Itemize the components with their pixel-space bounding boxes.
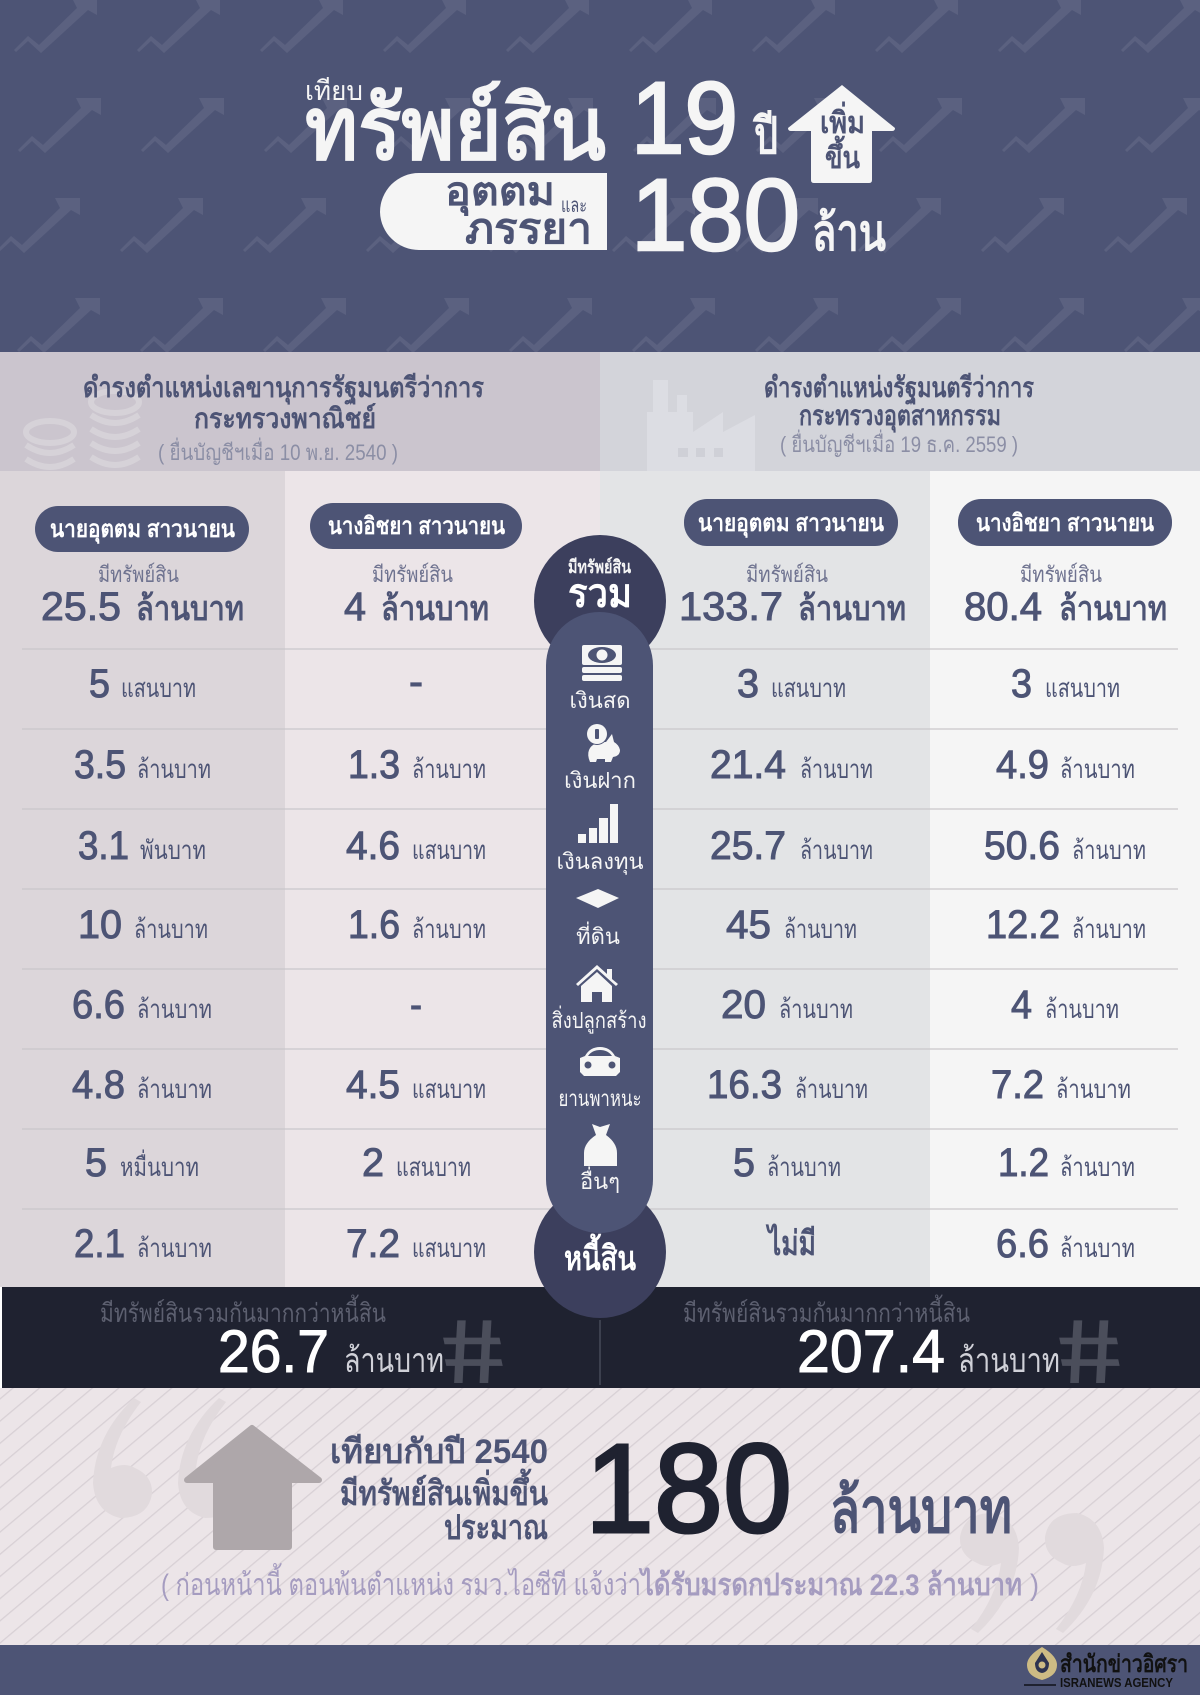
title: ปี	[752, 108, 778, 164]
column: Mrs Isaya 2559: ล้านบาท	[1045, 994, 1119, 1024]
column: Mrs Isaya 2540: 7.2	[346, 1222, 400, 1266]
name pill: นางอิชยา สาวนายน	[976, 510, 1155, 537]
column: Mr Uttama 2559: ล้านบาท	[767, 1152, 841, 1182]
total assets: ล้านบาท	[136, 590, 244, 628]
panel: left position heading	[0, 352, 600, 471]
panel: right position heading	[600, 352, 1200, 471]
column: Mr Uttama 2559: 21.4	[710, 743, 786, 787]
title: ทรัพย์สิน	[305, 79, 606, 178]
title: 180	[631, 158, 800, 272]
icon: money bag	[584, 1124, 617, 1166]
column: Mrs Isaya 2540: 4.5	[346, 1063, 400, 1107]
name pill: นางอิชยา สาวนายน	[328, 513, 506, 540]
panel: column backgrounds	[0, 471, 1200, 1287]
column: Mr Uttama 2559	[679, 499, 906, 1263]
net worth left: #	[430, 1300, 515, 1403]
panel: left position heading: กระทรวงพาณิชย์	[194, 403, 376, 434]
column: Mr Uttama 2540: 3.5	[74, 743, 126, 787]
column: Mrs Isaya 2540: -	[409, 660, 423, 704]
big number 180: 180	[585, 1418, 792, 1559]
circle: total assets	[534, 535, 666, 667]
unit: million baht: ล้านบาท	[830, 1477, 1012, 1546]
icon: coin stacks	[26, 391, 139, 467]
circle: liabilities: หนี้สิน	[564, 1233, 636, 1278]
circle: total assets: มีทรัพย์สิน	[568, 556, 632, 577]
column: Mrs Isaya 2559: ล้านบาท	[1060, 754, 1135, 784]
label: land: ที่ดิน	[576, 921, 620, 949]
panel: left position heading: ( ยื่นบัญชีฯเมื่อ 10 พ.ย. 2540 )	[158, 437, 398, 465]
title: 19	[631, 61, 738, 175]
column: Mr Uttama 2559: ล้านบาท	[800, 835, 873, 865]
column: Mrs Isaya 2559: ล้านบาท	[1060, 1152, 1135, 1182]
label: investment: เงินลงทุน	[556, 849, 644, 875]
column: Mr Uttama 2559: 20	[721, 983, 766, 1027]
panel: header background	[0, 0, 1200, 352]
panel: right position heading: กระทรวงอุตสาหกรรม	[799, 400, 1001, 433]
column: Mr Uttama 2540: ล้านบาท	[137, 754, 211, 784]
column: Mr Uttama 2559: ล้านบาท	[779, 994, 853, 1024]
column: Mrs Isaya 2540	[310, 503, 522, 1266]
panel: centre category column	[534, 535, 666, 1318]
total assets	[344, 562, 489, 629]
title: และ	[561, 195, 587, 217]
panel: right position heading: ดำรงตำแหน่งรัฐมนตรีว่าการ	[764, 372, 1034, 406]
icon: investment bars	[578, 804, 618, 843]
column: Mr Uttama 2540: 5	[89, 662, 110, 706]
column: Mrs Isaya 2559: 1.2	[998, 1141, 1049, 1185]
name pill	[35, 506, 249, 552]
column: Mr Uttama 2540: ล้านบาท	[137, 1233, 212, 1263]
column: Mrs Isaya 2559: ล้านบาท	[1072, 914, 1146, 944]
icon: piggy bank	[586, 723, 620, 762]
column: Mr Uttama 2559: ล้านบาท	[795, 1074, 868, 1104]
column: Mrs Isaya 2540: 1.6	[348, 903, 400, 947]
title: ภรรยา	[465, 205, 592, 252]
text: compared to 2540	[330, 1433, 548, 1547]
circle: liabilities	[534, 1186, 666, 1318]
logo: Isranews Agency: ISRANEWS AGENCY	[1060, 1675, 1173, 1690]
panel: left position heading: ดำรงตำแหน่งเลขานุการรัฐมนตรีว่าการ	[83, 372, 484, 406]
column: Mrs Isaya 2559: 6.6	[996, 1222, 1049, 1266]
column: Mr Uttama 2540: 5	[85, 1141, 107, 1185]
icon: cash	[582, 645, 622, 681]
note: )	[1030, 1569, 1039, 1602]
icon: car	[580, 1047, 620, 1076]
label: cash: เงินสด	[569, 688, 631, 713]
net worth left: มีทรัพย์สินรวมกันมากกว่าหนี้สิน	[100, 1294, 386, 1328]
label: others: อื่นๆ	[580, 1166, 620, 1194]
name pill	[684, 499, 898, 546]
column: Mrs Isaya 2559: 12.2	[986, 903, 1060, 947]
total assets	[41, 562, 244, 629]
panel: footer	[0, 1645, 1200, 1695]
column: Mr Uttama 2540: ล้านบาท	[134, 914, 208, 944]
column: Mrs Isaya 2559: ล้านบาท	[1060, 1233, 1135, 1263]
total assets: 133.7	[679, 585, 783, 629]
column: Mrs Isaya 2540: 1.3	[348, 743, 400, 787]
column: Mr Uttama 2559: ล้านบาท	[800, 754, 873, 784]
column: Mrs Isaya 2540: แสนบาท	[412, 835, 486, 865]
title: อุตตม	[445, 170, 555, 217]
column: Mrs Isaya 2540: ล้านบาท	[412, 914, 486, 944]
label: vehicles: ยานพาหนะ	[558, 1086, 642, 1111]
title: เทียบ	[305, 76, 363, 106]
label: buildings: สิ่งปลูกสร้าง	[552, 1005, 646, 1034]
total assets	[679, 562, 906, 629]
column: Mr Uttama 2540: 3.1	[78, 824, 129, 868]
column: Mrs Isaya 2540: -	[410, 983, 422, 1027]
column: Mrs Isaya 2540: แสนบาท	[412, 1074, 486, 1104]
decorative quote left	[93, 1398, 237, 1518]
column: Mrs Isaya 2559: แสนบาท	[1045, 673, 1120, 703]
note: ได้รับมรดกประมาณ 22.3 ล้านบาท	[638, 1567, 1022, 1602]
logo: Isranews Agency	[1024, 1647, 1188, 1690]
name pill: นายอุตตม สาวนายน	[698, 510, 885, 539]
total assets: 80.4	[964, 585, 1042, 629]
net worth right: ล้านบาท	[958, 1342, 1060, 1380]
column: Mrs Isaya 2559: 7.2	[991, 1063, 1044, 1107]
column: Mr Uttama 2540: 2.1	[74, 1222, 125, 1266]
column: Mrs Isaya 2559: 4.9	[996, 743, 1049, 787]
total assets: มีทรัพย์สิน	[746, 562, 828, 587]
total assets: มีทรัพย์สิน	[98, 562, 179, 587]
column: Mrs Isaya 2559: 50.6	[984, 824, 1060, 868]
icon: factory	[647, 380, 755, 471]
column: Mr Uttama 2559: ล้านบาท	[784, 914, 857, 944]
net worth right	[683, 1294, 1132, 1403]
column: Mr Uttama 2540: หมื่นบาท	[120, 1149, 199, 1182]
decorative quote right	[960, 1513, 1104, 1633]
column: Mr Uttama 2540: แสนบาท	[121, 673, 196, 703]
title	[305, 61, 886, 272]
text: compared to 2540: มีทรัพย์สินเพิ่มขึ้น	[340, 1468, 548, 1513]
net worth left: ล้านบาท	[344, 1342, 444, 1380]
total assets: มีทรัพย์สิน	[372, 562, 453, 587]
total assets	[964, 562, 1167, 629]
column: Mrs Isaya 2559: ล้านบาท	[1072, 835, 1146, 865]
column: Mrs Isaya 2540: แสนบาท	[396, 1152, 471, 1182]
net worth right: 207.4	[797, 1318, 945, 1385]
icon: up arrow with label: เพิ่ม	[820, 101, 865, 140]
net worth right: มีทรัพย์สินรวมกันมากกว่าหนี้สิน	[683, 1294, 970, 1328]
column: Mr Uttama 2559: 45	[726, 903, 771, 947]
column: Mrs Isaya 2540: 4.6	[346, 824, 400, 868]
column: Mr Uttama 2559: 16.3	[707, 1063, 782, 1107]
net worth right: #	[1046, 1300, 1132, 1403]
title: ล้าน	[812, 205, 886, 261]
column: Mr Uttama 2540: 6.6	[72, 983, 125, 1027]
column: Mr Uttama 2540: ล้านบาท	[137, 994, 212, 1024]
column: Mrs Isaya 2540: 2	[362, 1141, 384, 1185]
text: compared to 2540: เทียบกับปี 2540	[330, 1433, 548, 1471]
note	[161, 1563, 1039, 1602]
column: Mr Uttama 2540: ล้านบาท	[137, 1074, 212, 1104]
column: Mr Uttama 2540: พันบาท	[140, 835, 206, 865]
net worth left	[100, 1294, 515, 1403]
text: compared to 2540: ประมาณ	[444, 1509, 548, 1547]
total assets: มีทรัพย์สิน	[1020, 562, 1102, 587]
column: Mr Uttama 2559: แสนบาท	[771, 673, 846, 703]
icon: land	[576, 889, 619, 908]
name pill	[310, 503, 522, 549]
column: Mrs Isaya 2540: ล้านบาท	[412, 754, 486, 784]
total assets: ล้านบาท	[381, 590, 489, 628]
column: Mrs Isaya 2559: ล้านบาท	[1056, 1074, 1131, 1104]
icon: up arrow with label: ขึ้น	[825, 135, 860, 175]
total assets: 25.5	[41, 585, 121, 629]
column: Mr Uttama 2559: 25.7	[710, 824, 786, 868]
column: Mr Uttama 2559: 3	[737, 662, 759, 706]
column: Mr Uttama 2559: ไม่มี	[766, 1223, 816, 1263]
column: Mrs Isaya 2559: 4	[1011, 983, 1032, 1027]
column: Mr Uttama 2540	[35, 506, 249, 1266]
total assets: 4	[344, 585, 366, 629]
name pill	[958, 499, 1172, 546]
column: Mr Uttama 2540: 10	[78, 903, 122, 947]
total assets: ล้านบาท	[1059, 590, 1167, 628]
icon: up arrow with label	[788, 85, 895, 183]
circle: total assets: รวม	[568, 572, 632, 616]
icon: house	[576, 965, 618, 1002]
label: deposits: เงินฝาก	[564, 768, 636, 793]
icon: big up arrow	[187, 1428, 319, 1547]
net worth left: 26.7	[218, 1318, 329, 1385]
column: Mrs Isaya 2559	[958, 499, 1172, 1266]
column: Mrs Isaya 2559: 3	[1011, 662, 1032, 706]
panel: conclusion	[0, 1388, 1200, 1645]
column: Mrs Isaya 2540: แสนบาท	[412, 1233, 486, 1263]
column: Mr Uttama 2559: 5	[733, 1141, 755, 1185]
column: Mr Uttama 2540: 4.8	[72, 1063, 125, 1107]
panel: net worth band	[2, 1287, 1200, 1403]
panel: right position heading: ( ยื่นบัญชีฯเมื่อ 19 ธ.ค. 2559 )	[780, 429, 1018, 457]
note: ( ก่อนหน้านี้ ตอนพ้นตำแหน่ง รมว.ไอซีที แจ้งว่า	[161, 1563, 641, 1602]
name pill: นายอุตตม สาวนายน	[50, 516, 236, 545]
total assets: ล้านบาท	[798, 590, 906, 628]
